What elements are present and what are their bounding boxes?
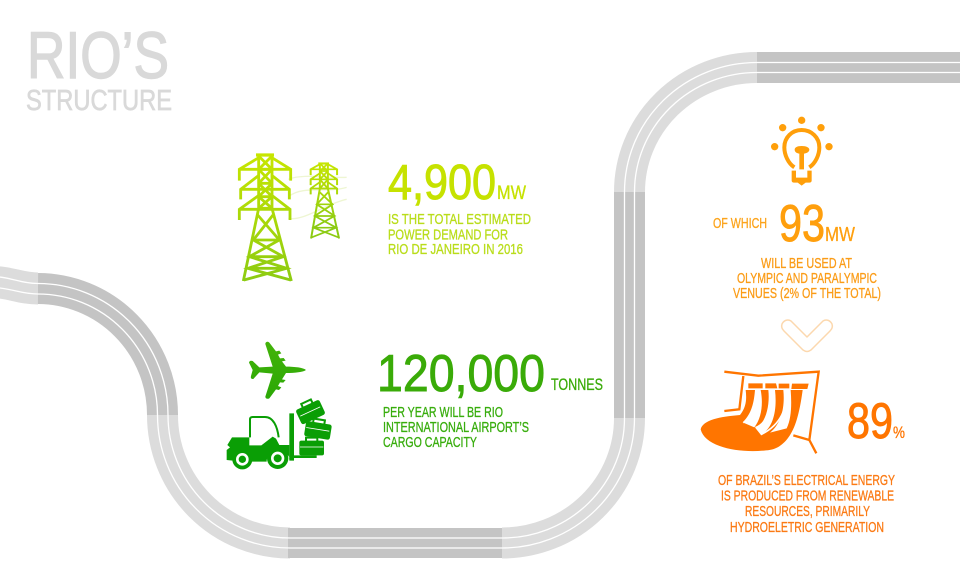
wheels <box>232 448 288 469</box>
stat: 89 percent <box>718 393 905 536</box>
description: POWER DEMAND FOR <box>388 228 508 244</box>
icon: hydroelectric dam <box>701 372 819 453</box>
bulb glass <box>784 130 819 167</box>
number 120,000: 120,000 <box>377 345 545 403</box>
bulb base <box>792 171 812 186</box>
description <box>388 212 531 258</box>
white water channels <box>743 391 787 435</box>
description: IS PRODUCED FROM RENEWABLE <box>721 488 894 504</box>
track segment: lower right curve light <box>502 418 630 543</box>
track segment: first curve dark <box>38 288 162 415</box>
track segment: left entry <box>0 282 38 288</box>
spillway gates <box>748 383 809 389</box>
mast and fork <box>289 413 317 461</box>
unit percent: % <box>893 423 905 442</box>
description: WILL BE USED AT <box>761 256 852 272</box>
description: OLYMPIC AND PARALYMPIC <box>737 271 877 287</box>
description: IS THE TOTAL ESTIMATED <box>388 212 531 228</box>
track segment: bottom straight dark <box>288 528 502 558</box>
unit MW: MW <box>497 182 526 204</box>
number 89: 89 <box>847 393 893 449</box>
label of which: OF WHICH <box>713 216 767 232</box>
description: VENUES (2% OF THE TOTAL) <box>733 286 881 302</box>
description: PER YEAR WILL BE RIO <box>383 405 503 421</box>
forklift cab outline <box>250 417 279 437</box>
luggage stack <box>294 396 333 455</box>
faint power lines <box>288 176 347 219</box>
icon: light bulb <box>771 117 833 186</box>
track segment: vertical straight dark <box>614 192 645 418</box>
large pylon <box>239 155 291 281</box>
stat: 120,000 tonnes <box>377 345 603 451</box>
description <box>718 473 895 536</box>
description: HYDROELETRIC GENERATION <box>730 520 884 536</box>
title line: STRUCTURE: STRUCTURE <box>26 85 172 117</box>
arrow: down chevron <box>782 320 832 352</box>
forklift body <box>227 437 290 462</box>
description: RIO DE JANEIRO IN 2016 <box>388 242 523 258</box>
description <box>383 405 529 451</box>
description: INTERNATIONAL AIRPORT’S <box>383 420 529 436</box>
title <box>26 18 172 117</box>
stat: 93 MW <box>713 195 881 302</box>
stat: 4,900 MW <box>388 156 531 258</box>
bulb rays <box>771 117 833 150</box>
description: RESOURCES, PRIMARILY <box>745 504 870 520</box>
title line: RIO'S: RIO’S <box>27 18 169 92</box>
unit TONNES: TONNES <box>551 376 603 394</box>
dam frame <box>724 372 819 453</box>
track segment: top straight dark <box>757 52 960 83</box>
number 4,900: 4,900 <box>388 156 496 210</box>
track segment: second curve light <box>162 415 290 543</box>
track segment: upper curve light <box>630 68 757 192</box>
description: OF BRAZIL’S ELECTRICAL ENERGY <box>718 473 895 489</box>
description <box>733 256 881 302</box>
unit MW: MW <box>825 224 855 246</box>
icon: power pylons <box>239 155 347 281</box>
icon: airplane <box>249 342 306 399</box>
reservoir and falls <box>701 390 803 451</box>
number 93: 93 <box>779 195 825 253</box>
description: CARGO CAPACITY <box>383 435 477 451</box>
small pylon <box>311 163 339 238</box>
filament <box>795 146 809 169</box>
icon: forklift with luggage <box>227 396 333 469</box>
